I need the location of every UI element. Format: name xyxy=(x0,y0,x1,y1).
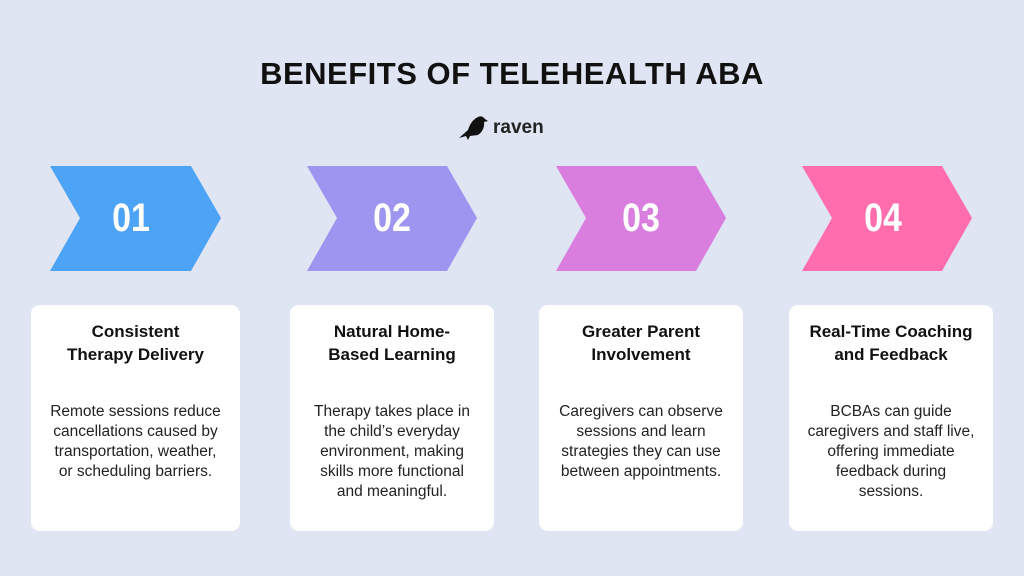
card 1: Therapy Delivery xyxy=(67,345,204,364)
card 4: caregivers and staff live, xyxy=(808,423,974,440)
card 3: Greater Parent xyxy=(582,322,700,341)
card 2: the child’s everyday xyxy=(324,423,460,440)
title: BENEFITS OF TELEHEALTH ABA xyxy=(260,56,764,91)
card 4: BCBAs can guide xyxy=(830,403,952,420)
number 02: 02 xyxy=(373,196,411,240)
card 1: Remote sessions reduce xyxy=(50,403,221,420)
card 3: Caregivers can observe xyxy=(559,403,723,420)
card 3: strategies they can use xyxy=(561,443,721,460)
card 3: sessions and learn xyxy=(576,423,706,440)
card 2: Based Learning xyxy=(328,345,456,364)
chevron 02 xyxy=(307,166,477,271)
logo: raven: raven xyxy=(493,117,544,138)
card 4 xyxy=(789,305,993,531)
number 04: 04 xyxy=(864,196,902,240)
card 4: Real-Time Coaching xyxy=(809,322,973,341)
number 01: 01 xyxy=(112,196,150,240)
card 1: cancellations caused by xyxy=(53,423,218,440)
card 2: and meaningful. xyxy=(337,483,447,500)
card 4: feedback during xyxy=(836,463,946,480)
card 4: offering immediate xyxy=(827,443,955,460)
card 2: Natural Home- xyxy=(334,322,450,341)
logo: raven xyxy=(459,116,544,140)
card 2: Therapy takes place in xyxy=(314,403,470,420)
card 2: skills more functional xyxy=(320,463,464,480)
card 2 xyxy=(290,305,494,531)
chevron 04 xyxy=(802,166,972,271)
chevron 03 xyxy=(556,166,726,271)
card 1: or scheduling barriers. xyxy=(59,463,212,480)
card 4: sessions. xyxy=(859,483,923,500)
chevron 01 xyxy=(50,166,221,271)
card 2: environment, making xyxy=(320,443,464,460)
card 3 xyxy=(539,305,743,531)
card 3: between appointments. xyxy=(561,463,721,480)
card 1: Consistent xyxy=(92,322,179,341)
card 1: transportation, weather, xyxy=(54,443,216,460)
card 4: and Feedback xyxy=(834,345,948,364)
card 3: Involvement xyxy=(591,345,691,364)
number 03: 03 xyxy=(622,196,660,240)
card 1 xyxy=(31,305,240,531)
